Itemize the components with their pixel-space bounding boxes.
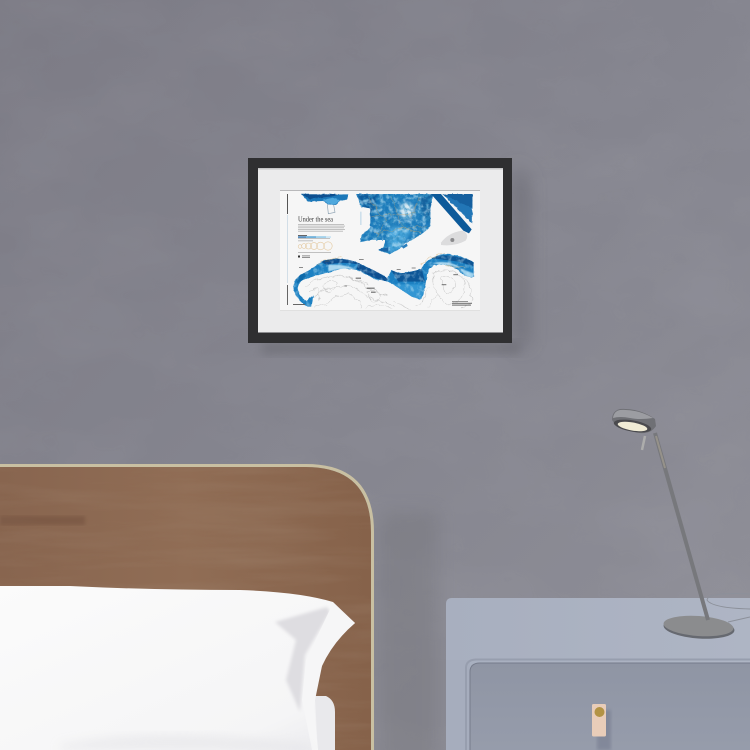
legend: flood depth scale — [298, 235, 331, 239]
map: small island contour inset — [441, 231, 467, 245]
framed infographic — [248, 158, 528, 354]
lamp arm — [655, 433, 708, 620]
side rule and publication mark — [287, 194, 305, 305]
title: Under the sea — [298, 216, 334, 224]
credit block — [452, 301, 472, 306]
bed headboard — [0, 466, 372, 750]
white mat — [258, 168, 503, 333]
white bed rest behind pillow — [315, 696, 335, 750]
nightstand — [446, 598, 750, 750]
lamp head — [612, 409, 656, 433]
lamp cord — [707, 594, 750, 622]
legend: tide circles — [298, 240, 332, 253]
legend: key swatch — [298, 256, 310, 258]
drawer handle — [592, 704, 611, 750]
picture frame — [248, 158, 512, 343]
map: Hong Kong Island coastline flood band — [293, 253, 474, 307]
lamp base — [663, 615, 735, 641]
map: place labels — [299, 259, 458, 293]
pillow — [0, 586, 355, 750]
desk lamp — [612, 409, 750, 641]
map: northern shore fragment — [302, 194, 348, 214]
map: hill contours on the island — [305, 270, 472, 308]
intro text block — [298, 224, 345, 232]
map: Kowloon peninsula flood depth — [356, 194, 433, 254]
drawer front — [470, 663, 750, 750]
poster sheet — [280, 190, 480, 311]
map: airport runway and east Kowloon — [431, 194, 472, 233]
